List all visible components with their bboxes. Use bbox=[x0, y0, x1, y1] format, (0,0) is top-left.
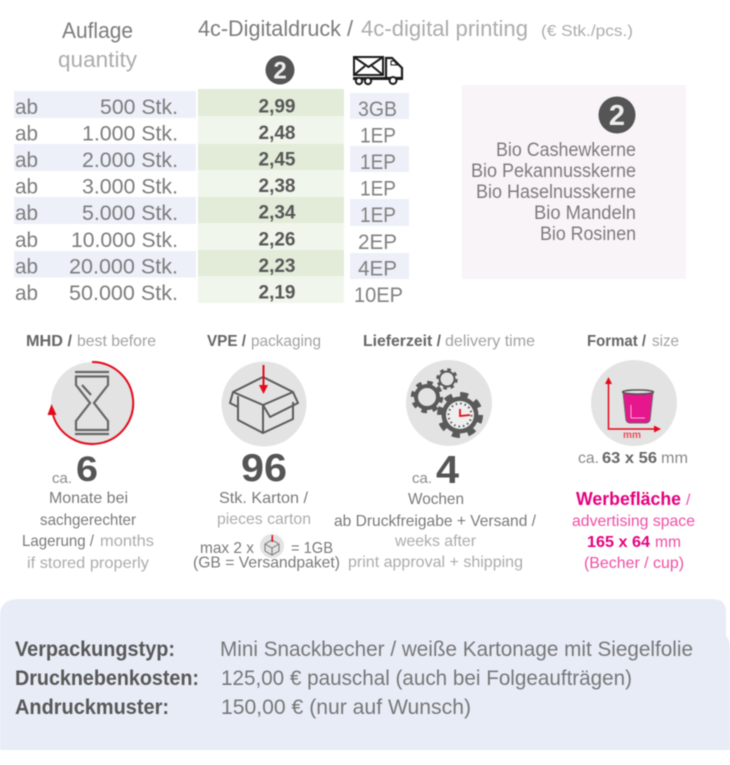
column: size and advertising space bbox=[572, 333, 695, 572]
table: price column: 2,34 bbox=[259, 202, 296, 224]
panel: product variety 2: 2 bbox=[609, 100, 625, 132]
table: price column: 2,48 bbox=[259, 123, 295, 144]
column: best before: Monate bei bbox=[49, 490, 128, 507]
icon: cup with dimensions bbox=[591, 360, 677, 446]
table: shipping units column: 1EP bbox=[360, 151, 396, 174]
column: packaging bbox=[193, 333, 340, 572]
table: quantity rows: ab bbox=[15, 96, 38, 119]
column: best before: ca. bbox=[52, 470, 72, 487]
icon: number badge 2 bbox=[266, 56, 294, 84]
column: packaging: = 1GB bbox=[291, 540, 333, 557]
table: price column: 2,38 bbox=[259, 176, 295, 197]
table: shipping units column: 1EP bbox=[360, 178, 396, 200]
table: shipping units column bbox=[350, 93, 409, 307]
column: delivery time: Wochen bbox=[408, 491, 464, 508]
table: price column: 2,45 bbox=[259, 150, 296, 170]
column: best before: best before bbox=[77, 333, 156, 350]
column: size and advertising space: Format / bbox=[587, 333, 647, 350]
table: quantity rows: 2.000 Stk. bbox=[82, 149, 178, 172]
column: delivery time: delivery time bbox=[445, 333, 535, 350]
heading: digital printing: 4c-digital printing bbox=[361, 16, 528, 41]
table: shipping units column: 10EP bbox=[354, 284, 403, 307]
column: size and advertising space: 63 x 56 bbox=[602, 450, 657, 467]
table: shipping units column: 4EP bbox=[358, 258, 397, 280]
heading: quantity column bbox=[58, 18, 137, 72]
table: quantity rows: 20.000 Stk. bbox=[69, 256, 178, 278]
column: size and advertising space: advertising space bbox=[572, 513, 695, 530]
panel: packaging and cost details: Mini Snackbecher / weiße Kartonage mit Siegelfolie bbox=[220, 638, 693, 661]
column: delivery time bbox=[334, 333, 537, 571]
column: packaging: Stk. Karton / bbox=[219, 490, 309, 507]
table: price column: 2,26 bbox=[259, 230, 295, 250]
table: shipping units column: 1EP bbox=[360, 204, 396, 227]
column: packaging: packaging bbox=[251, 333, 321, 350]
column: size and advertising space: mm bbox=[661, 450, 688, 467]
heading: digital printing: 4c-Digitaldruck bbox=[198, 16, 342, 41]
table: quantity rows: ab bbox=[15, 256, 38, 278]
icon: small box bbox=[260, 534, 284, 558]
column: best before: MHD / bbox=[26, 333, 73, 350]
column: packaging: (GB = Versandpaket) bbox=[193, 554, 340, 572]
heading: digital printing: / bbox=[347, 16, 354, 41]
icon: delivery truck with envelope bbox=[353, 57, 403, 84]
column: best before: months bbox=[100, 533, 154, 550]
table: quantity rows: 1.000 Stk. bbox=[82, 122, 178, 146]
panel: packaging and cost details: 150,00 € (nur auf Wunsch) bbox=[221, 696, 471, 719]
panel: product variety 2: Bio Pekannusskerne bbox=[471, 161, 636, 182]
icon: gears with clock bbox=[406, 360, 492, 446]
column: packaging: 96 bbox=[241, 447, 287, 490]
panel: packaging and cost details: Verpackungstyp: bbox=[15, 638, 175, 661]
table: quantity rows: ab bbox=[15, 202, 38, 225]
table: shipping units column: 2EP bbox=[358, 231, 397, 254]
panel: product variety 2: Bio Cashewkerne bbox=[496, 140, 636, 161]
icon: cup with dimensions: mm bbox=[623, 430, 641, 441]
panel: packaging and cost details: Andruckmuster: bbox=[15, 696, 169, 719]
table: price column: 2,19 bbox=[259, 282, 295, 304]
table: quantity rows: 5.000 Stk. bbox=[82, 202, 178, 225]
table: quantity rows: ab bbox=[15, 122, 38, 146]
table: quantity rows: 50.000 Stk. bbox=[69, 282, 178, 305]
panel: packaging and cost details bbox=[0, 599, 730, 750]
table: shipping units column: 3GB bbox=[358, 98, 397, 121]
icon: number badge 2: 2 bbox=[273, 58, 287, 84]
column: delivery time: Lieferzeit / bbox=[363, 333, 442, 350]
table: quantity rows: 10.000 Stk. bbox=[71, 229, 178, 252]
column: delivery time: weeks after bbox=[394, 533, 477, 550]
panel: product variety 2: Bio Mandeln bbox=[534, 203, 636, 224]
column: best before: if stored properly bbox=[27, 555, 149, 572]
panel: product variety 2: Bio Rosinen bbox=[540, 224, 636, 245]
table: price column bbox=[198, 89, 344, 304]
column: size and advertising space: 165 x 64 bbox=[587, 534, 650, 551]
table: quantity rows bbox=[14, 91, 196, 305]
heading: digital printing: (€ Stk./pcs.) bbox=[541, 23, 633, 40]
column: size and advertising space: ca. bbox=[578, 450, 599, 467]
column: size and advertising space: (Becher / cup) bbox=[584, 555, 684, 572]
icon: box with red arrow bbox=[222, 362, 306, 446]
column: best before bbox=[22, 333, 156, 572]
panel: product variety 2: Bio Haselnusskerne bbox=[476, 182, 636, 203]
table: shipping units column: 1EP bbox=[360, 124, 396, 148]
table: quantity rows: 3.000 Stk. bbox=[82, 176, 178, 198]
column: packaging: max 2 x bbox=[200, 540, 254, 557]
column: delivery time: ca. bbox=[412, 470, 432, 487]
column: best before: 6 bbox=[76, 450, 98, 489]
column: delivery time: ab Druckfreigabe + Versand / bbox=[334, 513, 537, 530]
column: delivery time: 4 bbox=[436, 449, 459, 492]
column: best before: sachgerechter bbox=[40, 512, 137, 529]
table: price column: 2,23 bbox=[259, 256, 295, 277]
panel: packaging and cost details: 125,00 € pauschal (auch bei Folgeaufträgen) bbox=[221, 667, 632, 690]
column: best before: Lagerung / bbox=[22, 533, 95, 550]
table: price column: 2,99 bbox=[259, 96, 295, 118]
column: size and advertising space: / bbox=[686, 492, 691, 509]
heading: quantity column: Auflage bbox=[62, 18, 133, 43]
table: quantity rows: 500 Stk. bbox=[100, 96, 178, 119]
column: size and advertising space: Werbefläche bbox=[576, 489, 681, 509]
panel: packaging and cost details: Drucknebenkosten: bbox=[15, 667, 199, 690]
column: size and advertising space: size bbox=[652, 333, 679, 350]
table: quantity rows: ab bbox=[15, 282, 38, 305]
column: delivery time: print approval + shipping bbox=[348, 554, 523, 571]
table: quantity rows: ab bbox=[15, 229, 38, 252]
column: size and advertising space: mm bbox=[655, 534, 681, 551]
table: quantity rows: ab bbox=[15, 176, 38, 198]
panel: product variety 2 bbox=[462, 85, 686, 279]
column: packaging: pieces carton bbox=[217, 511, 311, 528]
heading: digital printing bbox=[198, 16, 633, 41]
column: packaging: VPE / bbox=[207, 333, 247, 350]
table: quantity rows: ab bbox=[15, 149, 38, 172]
heading: quantity column: quantity bbox=[58, 47, 137, 72]
icon: hourglass with red arrow bbox=[48, 362, 133, 444]
